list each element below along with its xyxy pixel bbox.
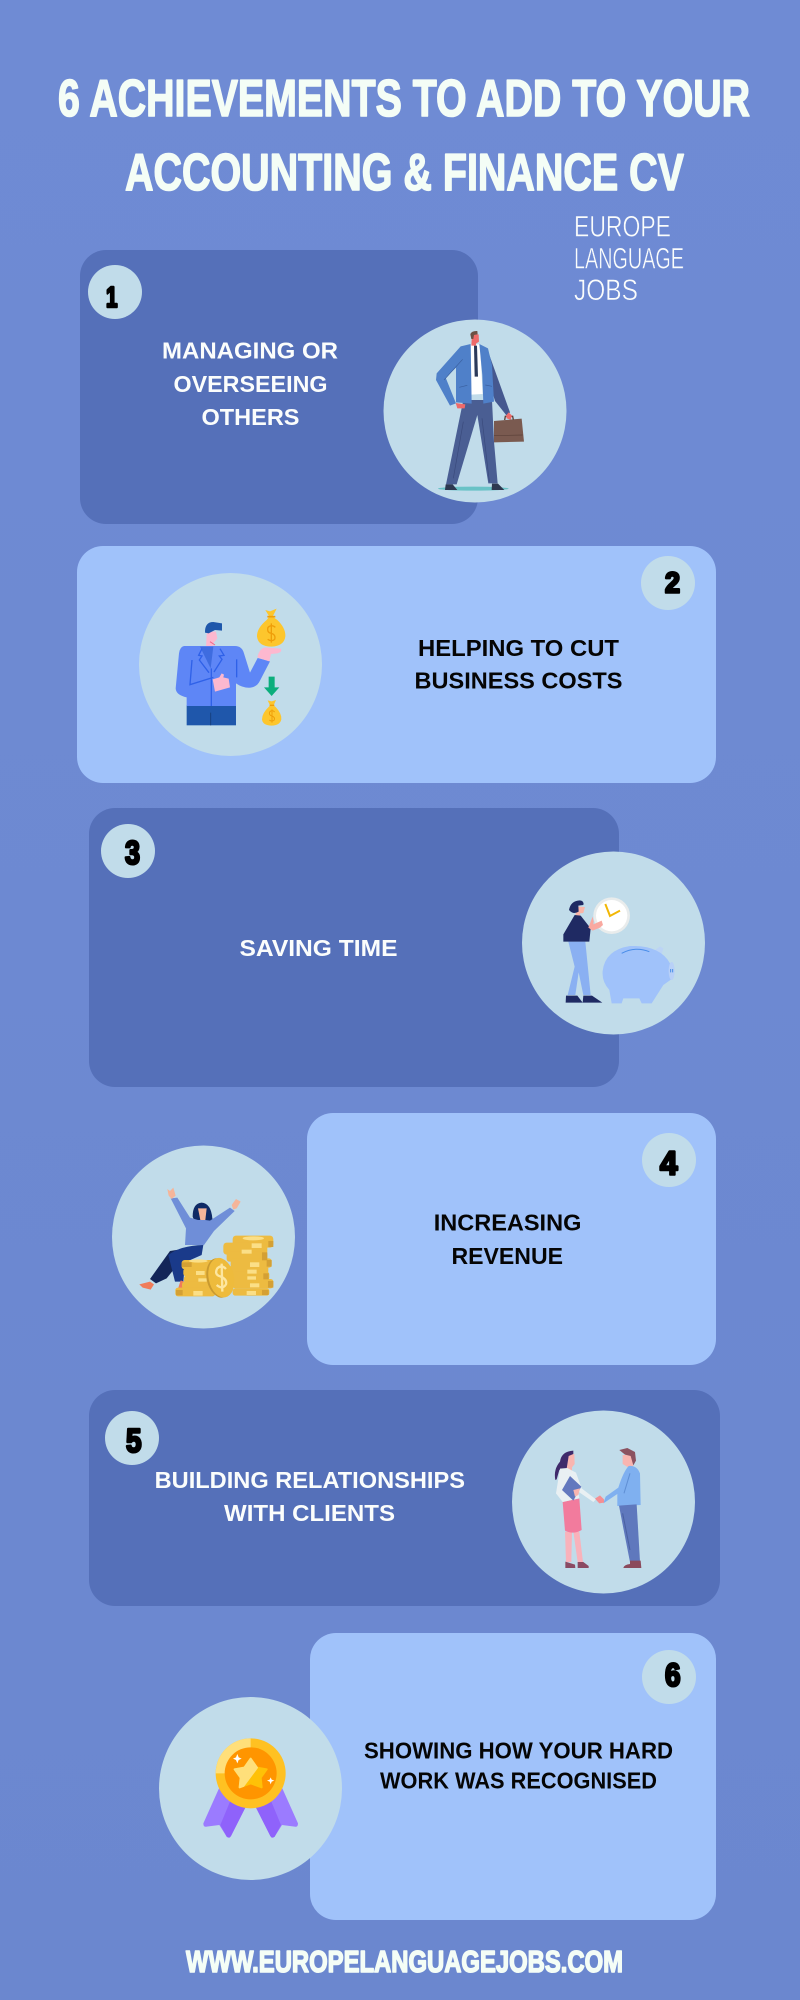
text: increasing revenue — [434, 1210, 581, 1269]
footer: website url: WWW.EUROPELANGUAGEJOBS.COM — [186, 1944, 623, 1979]
panel: achievement 3 — [89, 808, 705, 1087]
text: building relationships with clients: WITH CLIENTS — [224, 1500, 395, 1526]
text: helping to cut business costs: BUSINESS COSTS — [414, 668, 622, 694]
icon circle: woman sitting on coins — [112, 1146, 295, 1328]
text: saving time: SAVING TIME — [240, 935, 398, 961]
panel: achievement 4 — [112, 1113, 716, 1365]
text: helping to cut business costs — [414, 635, 622, 694]
icon circle: businessman with briefcase — [384, 320, 566, 502]
title — [58, 70, 750, 202]
badge: number 6 — [642, 1650, 696, 1704]
icon circle: man holding money bags — [139, 573, 322, 756]
panel: achievement 2 — [77, 546, 716, 783]
badge: number 5: 5 — [126, 1422, 142, 1459]
panel: achievement 1 — [80, 250, 566, 524]
text: managing or overseeing others — [162, 338, 338, 430]
icon circle: medal with star — [159, 1697, 342, 1880]
logo: Europe Language Jobs: JOBS — [574, 274, 638, 307]
panel: achievement 5 — [89, 1390, 720, 1606]
badge: number 5 — [105, 1411, 159, 1465]
badge: number 1: 1 — [106, 282, 118, 314]
icon circle: two people shaking hands — [512, 1410, 695, 1594]
text: showing how your hard work was recognised: SHOWING HOW YOUR HARD — [364, 1738, 673, 1764]
logo: Europe Language Jobs: EUROPE — [574, 210, 671, 244]
badge: number 2 — [641, 556, 695, 610]
text: managing or overseeing others: MANAGING OR — [162, 338, 338, 364]
badge: number 6: 6 — [665, 1657, 680, 1693]
text: helping to cut business costs: HELPING TO CUT — [418, 635, 620, 661]
text: increasing revenue: INCREASING — [434, 1210, 581, 1236]
text: managing or overseeing others: OTHERS — [202, 404, 300, 430]
text: showing how your hard work was recognised: WORK WAS RECOGNISED — [380, 1768, 657, 1794]
text: building relationships with clients — [155, 1467, 465, 1526]
text: managing or overseeing others: OVERSEEING — [174, 371, 328, 397]
badge: number 1 — [88, 265, 142, 319]
badge: number 3: 3 — [125, 834, 140, 871]
text: building relationships with clients: BUILDING RELATIONSHIPS — [155, 1467, 465, 1493]
badge: number 4: 4 — [660, 1144, 678, 1182]
badge: number 4 — [642, 1133, 696, 1187]
panel: achievement 6 — [159, 1633, 716, 1920]
badge: number 2: 2 — [665, 568, 680, 600]
logo: Europe Language Jobs — [574, 210, 684, 307]
text: showing how your hard work was recognised — [364, 1738, 673, 1794]
text: increasing revenue: REVENUE — [452, 1243, 563, 1269]
badge: number 3 — [101, 824, 155, 878]
logo: Europe Language Jobs: LANGUAGE — [574, 242, 684, 276]
icon circle: person with clock and piggy bank — [522, 852, 705, 1034]
